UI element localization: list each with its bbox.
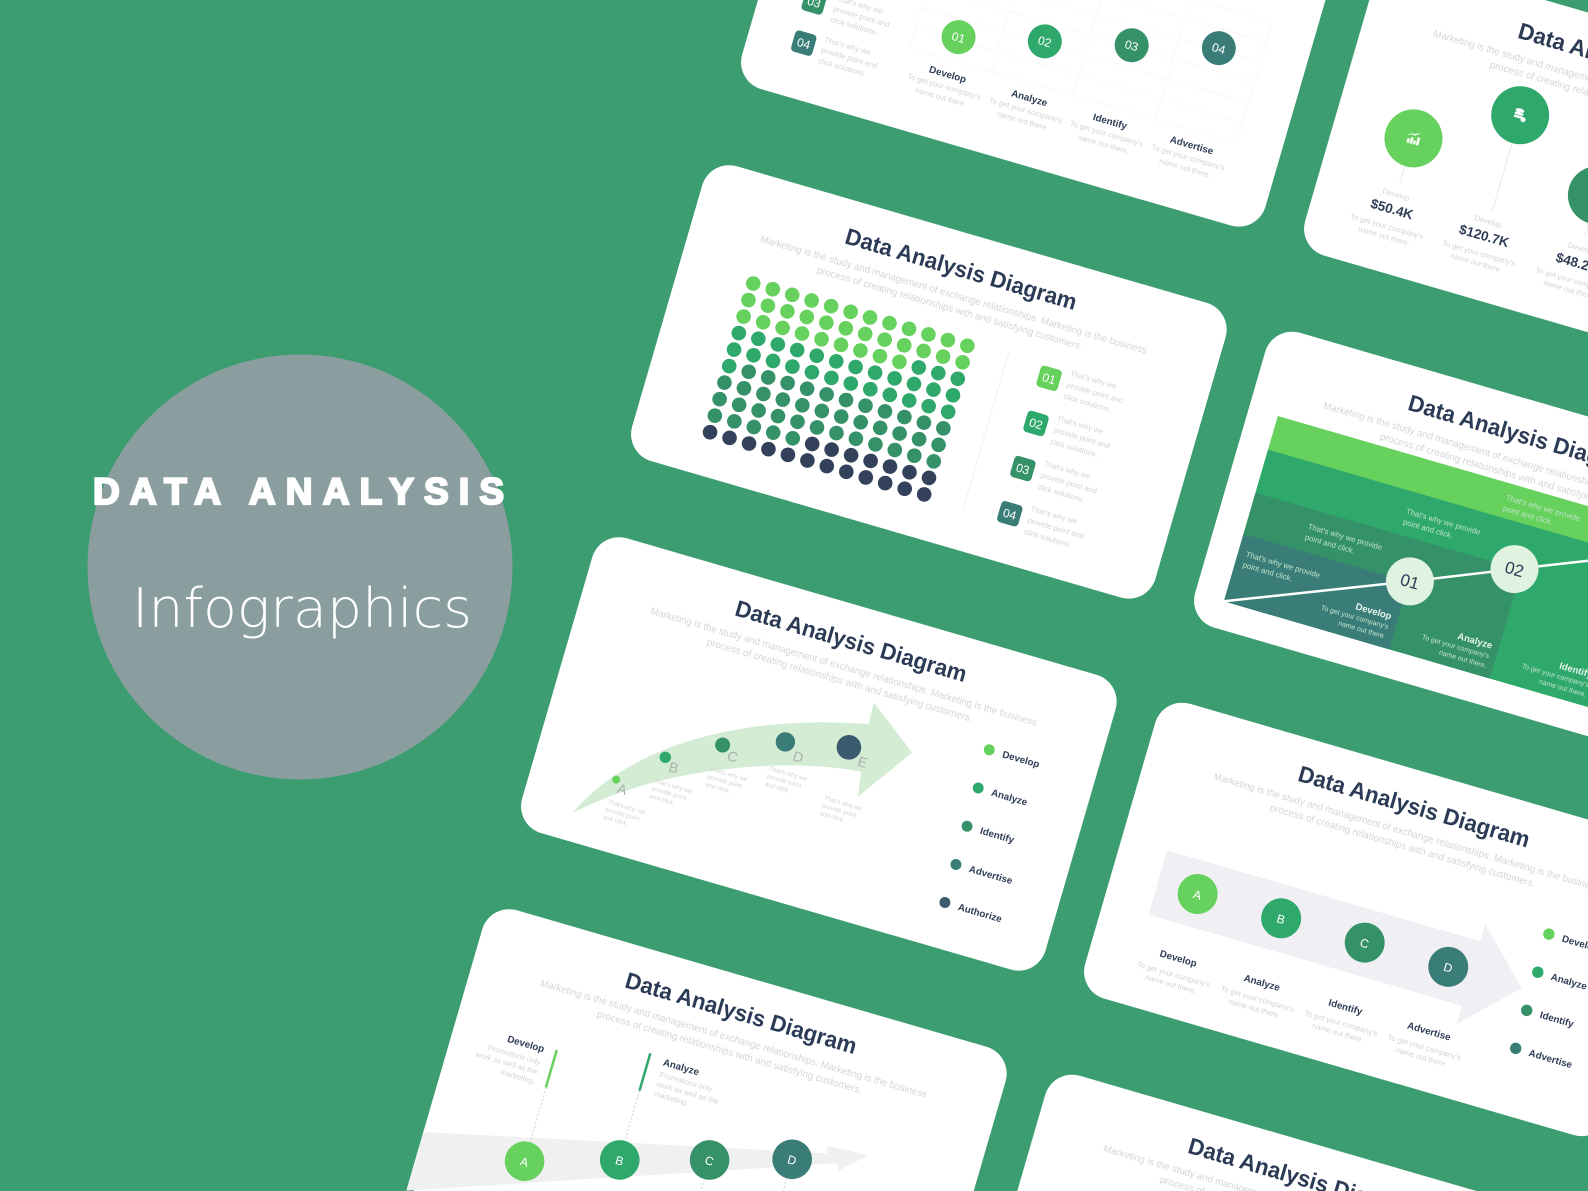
label Analyze: To get your company's — [1220, 984, 1295, 1014]
label Analyze: Analyze — [1456, 631, 1494, 652]
subtitle: Marketing is the study and management of exchange relationships. Marketing is the business — [649, 606, 1038, 729]
captions: and click. — [649, 793, 676, 807]
label Analyze: To get your company's — [988, 95, 1064, 125]
legend: Identify — [979, 826, 1016, 846]
figure 1: name out there. — [1357, 224, 1411, 248]
label Analyze: Analyze — [1242, 973, 1282, 994]
badge 04 text: provide point and — [820, 46, 879, 70]
captions: and click. — [602, 814, 629, 828]
circle 01: 01 — [1398, 570, 1422, 594]
text Analyze — [652, 1057, 726, 1116]
legend: Authorize — [957, 902, 1004, 925]
label Advertise: name out there. — [1158, 156, 1212, 180]
circle B — [595, 1135, 644, 1184]
arrow: curved — [573, 630, 923, 899]
band texts: point and click. — [1502, 504, 1554, 527]
title: Data Analysis Diagram — [842, 223, 1080, 315]
badge 04 text: click solutions. — [817, 56, 867, 78]
circle D: D — [786, 1152, 798, 1168]
label Develop — [904, 59, 986, 112]
figure 1: To get your company's — [1349, 212, 1425, 241]
label Identify: name out there. — [1538, 679, 1587, 699]
gray title circle — [88, 354, 512, 780]
label Develop: name out there. — [914, 85, 968, 109]
subtitle: Marketing is the study and management of exchange relationships. Marketing is the business — [539, 978, 928, 1101]
legend — [938, 743, 1048, 925]
figure 2: Develop — [1474, 213, 1503, 230]
text 01: That's why we — [1069, 369, 1118, 391]
letters: A — [616, 780, 630, 798]
captions: provide point — [766, 773, 802, 790]
text 03: That's why we — [1043, 459, 1091, 481]
label Analyze — [1418, 622, 1494, 670]
label Develop: Develop — [928, 64, 967, 86]
label Develop: To get your company's — [1136, 960, 1212, 989]
dot B — [658, 750, 672, 764]
letters: D — [791, 748, 805, 766]
badge 03 — [801, 0, 828, 16]
badge 02 — [1022, 410, 1050, 437]
bar Analyze — [638, 1053, 652, 1091]
circle C — [685, 1135, 734, 1185]
figure 2: $120.7K — [1457, 222, 1511, 250]
figure 2 — [1439, 207, 1526, 278]
label Develop: To get your company's — [1320, 605, 1390, 631]
circle D: D — [1442, 960, 1454, 976]
title: Data Analysis Diagram — [1295, 760, 1533, 852]
band texts — [1242, 428, 1581, 656]
letters: C — [726, 747, 740, 766]
circle B — [1256, 894, 1306, 943]
captions: provide point — [651, 785, 687, 802]
label Identify: name out there. — [1077, 133, 1130, 156]
panel: curved arrow slide — [514, 530, 1123, 977]
badge 03 — [1009, 455, 1037, 482]
label Develop: To get your company's — [907, 72, 982, 102]
band texts: That's why we provide — [1245, 550, 1321, 580]
label Identify: name out there. — [1311, 1021, 1365, 1044]
label Develop: Develop — [1158, 949, 1198, 970]
green circle with database icon — [1484, 79, 1556, 151]
badge 03 text: provide point and — [832, 4, 891, 29]
dot D — [773, 730, 797, 754]
bar Develop — [545, 1050, 558, 1088]
text 01: provide point and — [1066, 380, 1124, 405]
circle 02: 02 — [1036, 33, 1053, 50]
subtitle: process of creating relationships with and satisfying customers. — [706, 637, 974, 725]
captions: That's why we — [709, 766, 749, 784]
text 04: click solutions. — [1023, 527, 1073, 550]
text Develop: Promotions only — [487, 1043, 542, 1067]
circle 01: 01 — [950, 29, 967, 46]
label Advertise: name out there. — [1395, 1045, 1448, 1069]
text Develop: work as well as the — [474, 1050, 539, 1076]
text 02: click solutions. — [1049, 437, 1099, 459]
band texts: That's why we provide — [1505, 493, 1581, 523]
captions: provide point — [707, 773, 743, 790]
circle A: A — [519, 1154, 530, 1170]
legend: Analyze — [990, 788, 1029, 809]
badge 01: 01 — [1041, 370, 1058, 387]
label Analyze: Analyze — [1010, 88, 1049, 109]
label Identify: To get your company's — [1303, 1008, 1379, 1038]
panel: bottom right slide — [967, 1068, 1576, 1191]
title: Data Analysis Diagram — [732, 595, 970, 687]
captions: provide point — [821, 803, 857, 819]
figure 1 — [1346, 180, 1434, 251]
subtitle: Marketing is the study and management of exchange relationships. Marketing is the business — [759, 234, 1148, 357]
circle 03: 03 — [1123, 37, 1140, 54]
circle A — [1173, 869, 1222, 919]
circle 04: 04 — [1210, 40, 1227, 57]
label Advertise — [1147, 130, 1230, 183]
label Develop: Develop — [1354, 601, 1393, 622]
label Advertise — [1384, 1016, 1467, 1072]
captions: and click. — [764, 781, 791, 795]
badge 04 — [790, 30, 817, 57]
badge 04: 04 — [1001, 506, 1018, 523]
heading: DATA ANALYSIS: DATA ANALYSIS — [93, 471, 504, 512]
text 02: provide point and — [1053, 425, 1111, 450]
letters: E — [856, 753, 869, 771]
label Advertise: Advertise — [1406, 1020, 1452, 1044]
panel: gradient band slide — [1187, 325, 1588, 772]
badge 01 — [1035, 365, 1063, 392]
green circle with chart icon — [1378, 102, 1449, 174]
panel: straight arrow slide — [1077, 696, 1588, 1143]
band texts: point and click. — [1242, 560, 1294, 583]
band texts: That's why we provide — [1307, 522, 1383, 552]
circle A: A — [1192, 887, 1203, 903]
arrow: gray tapered — [406, 1034, 869, 1191]
band 4 light green — [1224, 416, 1588, 737]
text Develop — [471, 1026, 546, 1086]
text Analyze: Analyze — [662, 1057, 701, 1078]
circle B: B — [614, 1153, 625, 1169]
text 03: click solutions. — [1036, 482, 1086, 504]
band texts: point and click. — [1402, 517, 1454, 540]
text Analyze: work as well as the — [655, 1079, 720, 1106]
circle B: B — [1275, 911, 1287, 927]
circle A — [500, 1137, 549, 1186]
label Identify — [1066, 106, 1148, 159]
circle D — [1423, 942, 1473, 992]
figure 3 — [1532, 234, 1588, 305]
label Develop: name out there. — [1144, 972, 1198, 996]
label Advertise: Advertise — [1169, 134, 1215, 158]
label Advertise: To get your company's — [1387, 1032, 1462, 1062]
figure 1: Develop — [1381, 187, 1411, 203]
band texts: point and click. — [1304, 533, 1356, 556]
circle C: C — [1358, 936, 1371, 952]
label Analyze: name out there. — [1438, 649, 1487, 670]
legend: Analyze — [1549, 972, 1588, 993]
badge 04 text: That's why we — [823, 35, 872, 57]
label Identify — [1300, 992, 1383, 1048]
band 3 green — [1224, 450, 1588, 707]
band 2 dark green — [1224, 493, 1521, 679]
label Analyze — [985, 83, 1067, 136]
label Identify: To get your company's — [1521, 663, 1588, 689]
legend — [1508, 927, 1588, 1071]
dot A — [611, 775, 621, 785]
text 04: That's why we — [1030, 504, 1078, 526]
figure 1: $50.4K — [1369, 196, 1415, 222]
label Develop: name out there. — [1337, 620, 1386, 641]
legend: Advertise — [968, 864, 1014, 887]
panel: top right slide with money figures — [1297, 0, 1588, 400]
captions: That's why we — [823, 795, 863, 813]
captions: and click. — [704, 781, 731, 795]
subtitle: process of creating relationships with and satisfying customers. — [596, 1009, 864, 1097]
label Identify: To get your company's — [1069, 119, 1144, 149]
badge 03: 03 — [1014, 461, 1031, 478]
badge 02: 02 — [1028, 415, 1045, 433]
panel: dot matrix slide — [624, 158, 1233, 605]
badge 04 — [996, 500, 1023, 527]
captions: provide point — [604, 806, 641, 823]
legend: Advertise — [1527, 1048, 1574, 1071]
label Analyze: name out there. — [996, 109, 1050, 133]
captions: That's why we — [653, 778, 693, 795]
circle C: C — [703, 1153, 716, 1169]
panel: timeline slide — [404, 902, 1013, 1191]
figure 2: To get your company's — [1441, 238, 1517, 268]
letters: B — [667, 759, 681, 776]
text 03: provide point and — [1040, 471, 1098, 495]
badge 04: 04 — [795, 35, 812, 52]
legend: Identify — [1538, 1010, 1575, 1030]
label Identify: Identify — [1327, 998, 1364, 1018]
text Analyze: Promotions only — [659, 1070, 714, 1094]
label Advertise: To get your company's — [1151, 143, 1226, 172]
label Identify: Identify — [1092, 112, 1129, 132]
text Develop: marketing. — [500, 1067, 536, 1086]
label Identify — [1518, 651, 1588, 699]
badge 03 text: click solutions. — [829, 15, 879, 37]
dark green circle — [1561, 159, 1588, 231]
legend: Develop — [1001, 749, 1041, 771]
text 02: That's why we — [1056, 414, 1105, 436]
circle 02: 02 — [1503, 558, 1526, 581]
label Develop — [1133, 943, 1216, 999]
figure 2: name out there. — [1449, 251, 1503, 275]
circle 02 — [1024, 20, 1066, 62]
captions: That's why we — [768, 765, 808, 783]
text 04: provide point and — [1027, 516, 1085, 541]
circle 01 — [938, 16, 980, 58]
letters — [616, 691, 869, 860]
captions — [602, 725, 867, 889]
circle 04 — [1198, 27, 1240, 69]
label Develop — [1317, 592, 1393, 641]
subtitle: process of creating relationships with and satisfying customers. — [1269, 803, 1537, 890]
text 01: click solutions. — [1062, 392, 1112, 414]
circle 01 — [1380, 552, 1440, 611]
circle C — [1340, 918, 1390, 967]
label Analyze: To get your company's — [1421, 634, 1490, 660]
trend line — [1224, 416, 1588, 737]
circle D — [768, 1135, 817, 1184]
band texts: That's why we provide — [1405, 507, 1481, 537]
label Analyze: name out there. — [1228, 997, 1281, 1020]
captions: and click. — [819, 810, 846, 824]
circle 03 — [1111, 24, 1153, 66]
band 1 teal — [1224, 534, 1409, 649]
subheading: Infographics: Infographics — [132, 577, 472, 640]
dot matrix chart — [701, 274, 976, 503]
panel: top slide with numbered circles — [734, 0, 1343, 233]
title: Data Analysis Diagram — [622, 967, 860, 1059]
label Analyze — [1217, 968, 1300, 1023]
dot E — [834, 732, 864, 763]
dot C — [713, 736, 732, 754]
subtitle: process of creating relationships with and satisfying customers. — [816, 265, 1084, 353]
circle 02 — [1485, 539, 1544, 599]
arrow: straight — [1143, 833, 1536, 1039]
text Develop: Develop — [506, 1034, 546, 1055]
text Analyze: marketing. — [653, 1089, 690, 1108]
captions: That's why we — [607, 799, 647, 816]
